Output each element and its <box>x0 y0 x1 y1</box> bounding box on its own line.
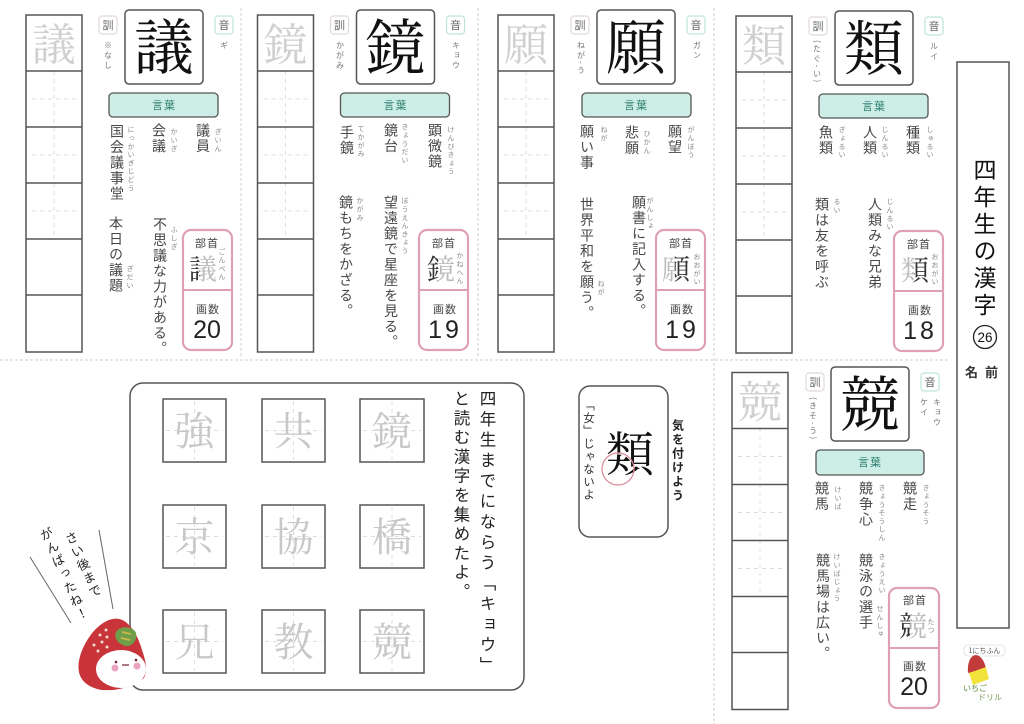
worksheet number <box>974 326 996 348</box>
vocabulary: るい <box>832 198 842 215</box>
vocabulary <box>106 122 223 356</box>
vocabulary: ぼうえんきょう <box>400 197 410 255</box>
kanji cells: 橋 <box>372 506 412 563</box>
vocabulary: きょうだい <box>400 123 410 164</box>
radical and stroke count: 部首 <box>195 235 219 251</box>
vocabulary: ぎょるい <box>837 125 847 159</box>
kanji cells: 強 <box>174 400 216 457</box>
writing column 議: 議 <box>32 9 76 73</box>
on label: 音 <box>450 17 461 33</box>
radical and stroke count: 19 <box>428 316 462 344</box>
on label <box>215 16 233 34</box>
words header: 言葉 <box>152 97 176 113</box>
encouragement text: さい後まで <box>60 528 107 602</box>
panel: kanji 類 <box>736 2 943 353</box>
vocabulary: ねが <box>596 280 606 297</box>
logo: ドリル <box>978 692 1002 703</box>
vocabulary: 競争心 <box>856 481 876 528</box>
on reading <box>918 398 942 428</box>
radical and stroke count: 20 <box>193 316 221 344</box>
vocabulary: きょうそう <box>921 484 931 526</box>
kanji cells: 京 <box>174 506 214 563</box>
vocabulary: 本日の議題 <box>106 216 126 294</box>
on reading: キョウ <box>450 41 462 71</box>
big kanji 願: 願 <box>606 1 667 87</box>
panel: kanji 願 <box>498 1 705 352</box>
radical and stroke count <box>419 230 468 350</box>
radical and stroke count: 画数 <box>903 658 927 674</box>
writing column 類 <box>736 10 792 353</box>
panel: kyou kanji collection <box>130 383 524 690</box>
kun label: 訓 <box>574 17 586 33</box>
vocabulary: 望遠鏡で星座を見る。 <box>381 195 401 350</box>
vocabulary: 願い事 <box>577 124 597 170</box>
radical and stroke count: 部首 <box>907 236 931 252</box>
vocabulary: 不思議な力がある。 <box>150 217 170 356</box>
worksheet number: 26 <box>978 329 993 345</box>
vocabulary: 願書に記入する。 <box>629 195 649 319</box>
collection caption: 四年生までにならう「キョウ」 <box>476 390 500 677</box>
kanji cells: 鏡 <box>372 400 412 457</box>
on reading: ルイ <box>928 42 940 62</box>
writing column 願 <box>498 9 554 352</box>
name label: 名前 <box>965 362 1005 381</box>
radical and stroke count: 19 <box>665 316 699 344</box>
kanji cells: 教 <box>274 611 314 668</box>
words header <box>819 94 928 118</box>
panel: kanji 鏡 <box>258 1 468 352</box>
radical and stroke count: おおがい <box>692 253 702 286</box>
collection caption: と読む漢字を集めたよ。 <box>450 390 474 602</box>
big kanji 鏡: 鏡 <box>366 1 426 87</box>
radical and stroke count: 画数 <box>433 301 457 317</box>
vocabulary: 顕微鏡 <box>425 123 445 170</box>
on label: 音 <box>690 17 702 33</box>
radical and stroke count <box>894 231 943 351</box>
logo: 1にちふん <box>969 646 1000 656</box>
vocabulary: けいばじょう <box>832 553 842 603</box>
hint kanji with circle: 類 <box>606 416 655 485</box>
radical and stroke count: 鏡 <box>427 248 455 288</box>
vocabulary: 鏡台 <box>381 123 401 154</box>
writing column 競 <box>732 366 788 710</box>
radical and stroke count: 18 <box>903 317 937 345</box>
kun label: 訓 <box>334 17 345 33</box>
radical and stroke count <box>183 230 232 350</box>
kun label <box>571 16 589 34</box>
hint note: 「女」じゃないよ <box>581 399 597 501</box>
kanji cells: 協 <box>274 506 314 563</box>
vocabulary <box>812 125 935 290</box>
radical and stroke count: たつ <box>926 618 936 635</box>
encouragement text: がんばったね！ <box>35 523 94 625</box>
on label <box>925 17 943 35</box>
on label <box>687 16 705 34</box>
vocabulary: にっかいぎじどう <box>126 126 136 192</box>
words header <box>582 93 691 117</box>
vocabulary: 魚類 <box>816 125 836 156</box>
radical and stroke count: 部首 <box>903 592 927 608</box>
title panel <box>957 62 1009 628</box>
logo: いちご <box>963 683 987 694</box>
vocabulary: 人類 <box>860 125 880 156</box>
vocabulary: 鏡もちをかざる。 <box>336 195 356 319</box>
on label: 音 <box>218 17 230 33</box>
vocabulary: 国会議事堂 <box>107 124 127 202</box>
kun label <box>99 16 117 34</box>
big kanji 議: 議 <box>134 1 194 87</box>
on reading: ケイ <box>918 398 930 418</box>
radical and stroke count: 画数 <box>670 301 694 317</box>
writing column 類: 類 <box>742 10 787 74</box>
vocabulary: じんるい <box>885 198 895 231</box>
vocabulary: ぎいん <box>213 127 223 153</box>
radical and stroke count: かねへん <box>455 252 465 285</box>
radical and stroke count <box>889 588 939 708</box>
writing column 競: 競 <box>738 366 782 430</box>
kun label: 訓 <box>102 17 114 33</box>
big kanji 類: 類 <box>844 2 905 88</box>
vocabulary: 世界平和を願う。 <box>577 197 597 321</box>
vocabulary: きょうそうしん <box>877 484 887 542</box>
words header: 言葉 <box>858 454 882 470</box>
radical and stroke count: 議 <box>189 248 217 288</box>
kanji cells: 競 <box>372 611 412 668</box>
words header <box>109 93 218 117</box>
vocabulary: 競走 <box>900 481 920 512</box>
speech lines <box>30 530 113 623</box>
radical and stroke count: 競 <box>899 605 927 645</box>
vocabulary: 会議 <box>149 123 169 154</box>
kun reading: (きそ-う) <box>808 397 818 441</box>
vocabulary: 人類みな兄弟 <box>865 197 885 290</box>
kun reading: かがみ <box>334 41 346 71</box>
kun reading: (たぐ-い) <box>812 40 822 84</box>
radical and stroke count: 願 <box>662 248 691 288</box>
on label: 音 <box>924 374 936 390</box>
vocabulary <box>336 123 456 350</box>
vocabulary: 競泳の選手 <box>856 553 876 630</box>
on reading: キョウ <box>932 398 942 428</box>
hint heading: 気を付けよう <box>670 418 686 503</box>
kun label <box>330 16 348 34</box>
on label <box>446 16 464 34</box>
radical and stroke count: 部首 <box>432 235 456 251</box>
collection caption <box>450 390 500 677</box>
words header: 言葉 <box>384 97 408 113</box>
writing column 鏡 <box>258 9 314 352</box>
logo <box>963 645 1005 703</box>
kun label <box>809 17 827 35</box>
on label: 音 <box>928 18 940 34</box>
radical and stroke count: 部首 <box>669 235 693 251</box>
words header: 言葉 <box>862 98 886 114</box>
vocabulary: ねが <box>599 126 609 143</box>
title: 四年生の漢字 <box>968 158 1002 320</box>
kun label: 訓 <box>810 374 820 390</box>
kanji cells <box>163 399 424 673</box>
on reading: ガン <box>692 41 702 61</box>
vocabulary: かがみ <box>355 197 365 222</box>
vocabulary: 手鏡 <box>337 125 357 156</box>
radical and stroke count: 画数 <box>196 301 220 317</box>
radical and stroke count: ごんべん <box>217 247 227 281</box>
words header <box>340 93 450 117</box>
words header <box>816 450 924 475</box>
vocabulary <box>577 124 696 321</box>
kun label <box>806 373 824 391</box>
on label <box>921 373 939 391</box>
kun reading: ※なし <box>102 41 114 71</box>
writing column 鏡: 鏡 <box>264 9 308 73</box>
vocabulary: がんぼう <box>686 125 696 159</box>
vocabulary: てかがみ <box>356 125 366 158</box>
radical and stroke count: 類 <box>901 249 930 289</box>
vocabulary: ひかん <box>642 130 652 155</box>
words header: 言葉 <box>624 97 648 113</box>
writing column 願: 願 <box>504 9 549 73</box>
kun reading: ねが-う <box>576 41 586 76</box>
panel: kanji 議 <box>26 1 233 356</box>
vocabulary: 悲願 <box>622 125 642 156</box>
kanji cells: 共 <box>274 400 314 457</box>
vocabulary: せんしゅ <box>875 605 885 638</box>
radical and stroke count: おおがい <box>930 253 940 286</box>
vocabulary: がんしょ <box>645 196 655 230</box>
vocabulary: 種類 <box>903 125 923 156</box>
panel: kanji 競 <box>732 358 942 710</box>
big kanji 競: 競 <box>840 358 900 444</box>
writing column 議 <box>26 9 82 352</box>
vocabulary <box>812 481 931 662</box>
radical and stroke count <box>656 230 705 350</box>
vocabulary: しゅるい <box>925 126 935 159</box>
vocabulary: ぎだい <box>125 264 135 290</box>
icon: strawberry character <box>78 619 146 690</box>
vocabulary: 議員 <box>193 122 213 154</box>
radical and stroke count: 20 <box>900 673 928 701</box>
vocabulary: 競馬 <box>812 481 832 512</box>
kanji cells: 兄 <box>174 611 214 668</box>
vocabulary: ふしぎ <box>169 226 179 251</box>
vocabulary: かいぎ <box>169 128 179 153</box>
vocabulary: 類は友を呼ぶ <box>812 197 832 290</box>
vocabulary: けいば <box>833 486 843 511</box>
vocabulary: けんびきょう <box>446 126 456 176</box>
vocabulary: 競馬場は広い。 <box>813 553 833 662</box>
kun label: 訓 <box>812 18 824 34</box>
radical and stroke count: 画数 <box>908 302 932 318</box>
hint card <box>579 386 668 537</box>
vocabulary: じんるい <box>880 126 890 159</box>
on reading: ギ <box>218 41 230 51</box>
vocabulary: きょうえい <box>877 553 887 594</box>
vocabulary: 願望 <box>665 124 685 155</box>
